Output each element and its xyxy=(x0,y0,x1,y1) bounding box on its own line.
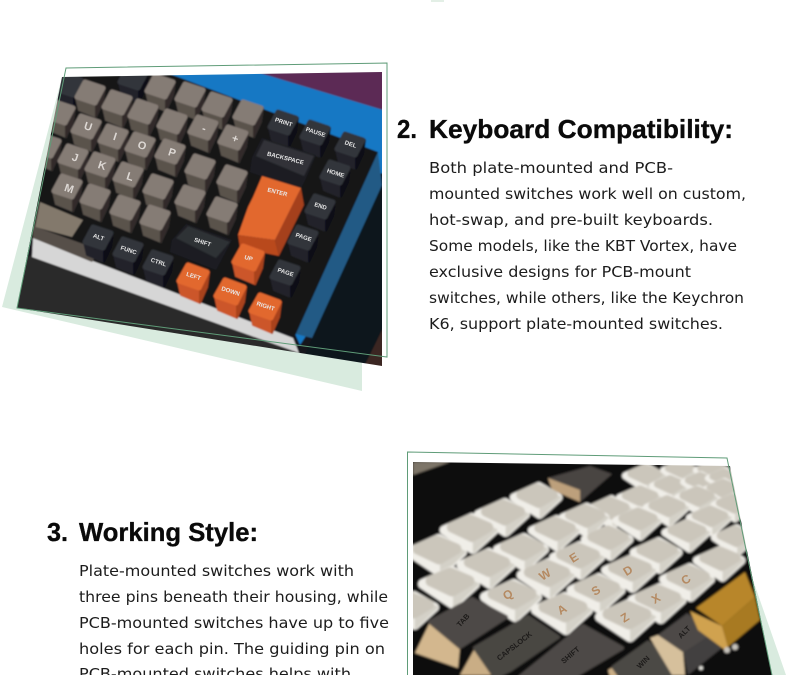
number: 3: 3. xyxy=(47,517,68,547)
cream key rows xyxy=(388,462,756,640)
key legends: SHIFT xyxy=(193,238,212,249)
photo: keyboard with orange keys xyxy=(18,72,382,366)
heading: Keyboard Compatibility: Keyboard Compatibility: xyxy=(429,114,733,144)
key legends: K xyxy=(96,159,108,173)
text block: keyboard compatibility xyxy=(429,159,746,333)
key legends: E xyxy=(567,550,581,566)
thin green frame xyxy=(408,452,773,675)
panel: cream keyboard photo with green frame xyxy=(388,452,786,675)
wide keys: backspace and shift xyxy=(170,138,316,270)
small stem pegs xyxy=(699,644,738,670)
green accent shape behind photo xyxy=(746,560,786,675)
key legends xyxy=(455,550,694,671)
key legends: Q xyxy=(500,586,516,603)
key legends: ALT xyxy=(676,624,693,640)
panel: keyboard photo with green frame xyxy=(0,60,400,391)
key legends: PAUSE xyxy=(305,127,326,139)
gold key xyxy=(690,572,760,650)
key legends: X xyxy=(649,591,663,607)
decorative fragment: top edge xyxy=(431,0,444,2)
key legends: FUNC xyxy=(119,246,138,257)
text block: working style: holes for each pin. The guiding pin on xyxy=(79,640,385,658)
thin green frame xyxy=(17,63,387,357)
key legends: DOWN xyxy=(220,286,240,298)
key legends: P xyxy=(167,146,177,160)
dark modifier keys xyxy=(415,599,723,675)
photo: cream keyboard xyxy=(413,462,772,675)
key legends: O xyxy=(136,139,148,153)
key legends: M xyxy=(63,182,75,196)
text block: keyboard compatibility: mounted switches work well on custom, xyxy=(429,185,746,203)
key legends: DEL xyxy=(344,140,357,150)
key legends: CAPSLOCK xyxy=(495,629,534,663)
key legends: S xyxy=(589,583,603,599)
green accent shape behind photo xyxy=(2,72,382,391)
key legends: PAGE xyxy=(295,233,312,243)
key legends: C xyxy=(678,571,694,588)
key legends: RIGHT xyxy=(256,301,275,313)
key legends: A xyxy=(554,601,570,618)
text block: working style xyxy=(79,562,389,675)
key legends: PAGE xyxy=(277,268,294,278)
key legends: CTRL xyxy=(150,258,167,268)
text block: keyboard compatibility: Both plate-mounted and PCB- xyxy=(429,159,673,177)
text block: working style: Plate-mounted switches work with xyxy=(79,562,354,580)
key legends: END xyxy=(313,202,328,212)
text block: keyboard compatibility: hot-swap, and pre-built keyboards. xyxy=(429,211,713,229)
heading: Working Style: Working Style: xyxy=(79,517,258,547)
key legends: W xyxy=(536,565,554,584)
key legends: I xyxy=(112,131,118,143)
key legends xyxy=(63,117,357,313)
text block: keyboard compatibility: exclusive designs for PCB-mount xyxy=(429,263,691,281)
text block: working style: three pins beneath their housing, while xyxy=(79,588,388,606)
key legends: BACKSPACE xyxy=(266,152,304,166)
key legends: WIN xyxy=(635,654,652,671)
key legends: SHIFT xyxy=(559,644,582,665)
text block: keyboard compatibility: K6, support plate-mounted switches. xyxy=(429,315,723,333)
text block: keyboard compatibility: Some models, like the KBT Vortex, have xyxy=(429,237,737,255)
key legends: + xyxy=(230,132,240,146)
key legends: U xyxy=(82,120,94,134)
key legends: UP xyxy=(243,255,253,263)
key legends: D xyxy=(620,562,636,579)
key legends: J xyxy=(70,151,80,165)
key legends: - xyxy=(200,123,208,136)
key legends: L xyxy=(125,170,135,184)
key legends: ALT xyxy=(92,233,105,243)
dark blurred key at the back xyxy=(548,466,612,502)
number: 2: 2. xyxy=(397,114,417,144)
key legends: ENTER xyxy=(267,188,288,199)
key legends: PRINT xyxy=(274,117,293,129)
key legends: HOME xyxy=(326,168,345,180)
key legends: Z xyxy=(618,610,632,625)
orange keys xyxy=(178,176,304,333)
key rows xyxy=(32,67,365,297)
key legends: LEFT xyxy=(185,272,202,282)
key legends: TAB xyxy=(455,611,472,629)
text block: working style: PCB-mounted switches have up to five xyxy=(79,614,389,632)
text block: keyboard compatibility: switches, while others, like the Keychron xyxy=(429,289,744,307)
